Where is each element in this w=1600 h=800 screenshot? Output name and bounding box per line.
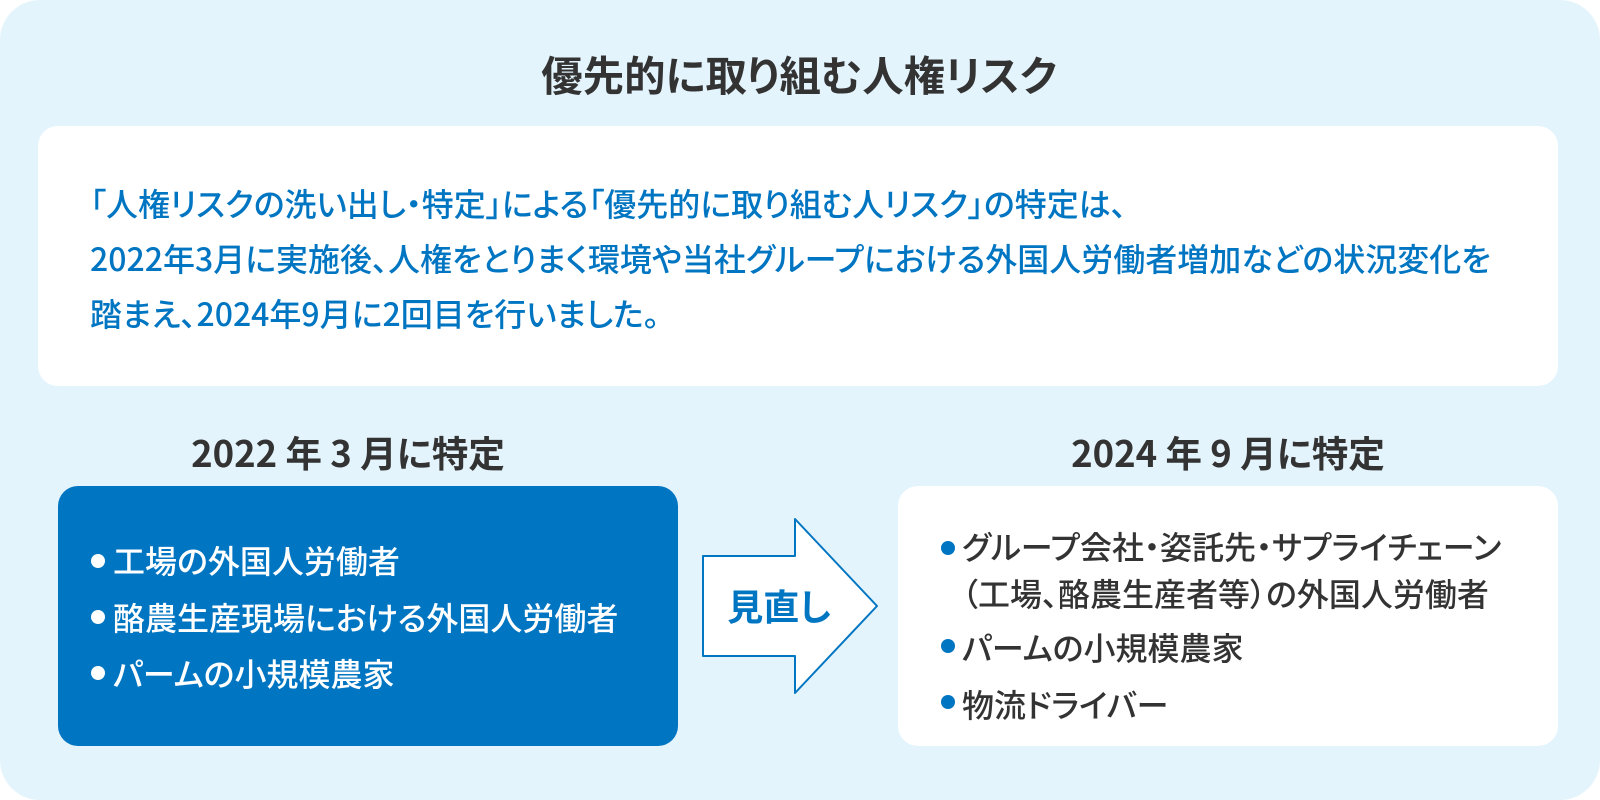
intro paragraph: 踏まえ、2024年9月に2回目を行いました。 [90, 290, 660, 336]
bullet item 2: パームの小規模農家 [962, 624, 1244, 670]
panel: intro text [38, 126, 1558, 386]
bullet item 3: パームの小規模農家 [113, 650, 395, 696]
bullet item 1: グループ会社・姿託先・サプライチェーン [962, 523, 1501, 569]
bullet item 2: 酪農生産現場における外国人労働者 [113, 594, 618, 640]
intro paragraph [90, 180, 1491, 336]
title: 優先的に取り組む人権リスク [541, 43, 1057, 103]
bullet item 1 continued: （工場、酪農生産者等）の外国人労働者 [962, 570, 1489, 616]
panel: 2024 risks [898, 486, 1558, 746]
bullet dot 1 [91, 554, 105, 568]
intro paragraph: 2022年3月に実施後、人権をとりまく環境や当社グループにおける外国人労働者増加などの状況変化を [90, 235, 1491, 281]
bullet dot 1 [941, 541, 955, 555]
arrow: review: 見直し [727, 579, 831, 631]
arrow: review [702, 518, 878, 694]
heading: 2024: 2024 年 9 月に特定 [1071, 425, 1385, 478]
bullet dot 2 [91, 610, 105, 624]
panel: 2022 risks [58, 486, 678, 746]
bullet dot 3 [941, 695, 955, 709]
bullet dot 3 [91, 666, 105, 680]
heading: 2022: 2022 年 3 月に特定 [191, 425, 505, 478]
intro paragraph: 「人権リスクの洗い出し・特定」による「優先的に取り組む人リスク」の特定は、 [90, 180, 1127, 226]
bullet item 1: 工場の外国人労働者 [113, 537, 400, 583]
bullet dot 2 [941, 639, 955, 653]
bullet item 3: 物流ドライバー [962, 681, 1168, 727]
